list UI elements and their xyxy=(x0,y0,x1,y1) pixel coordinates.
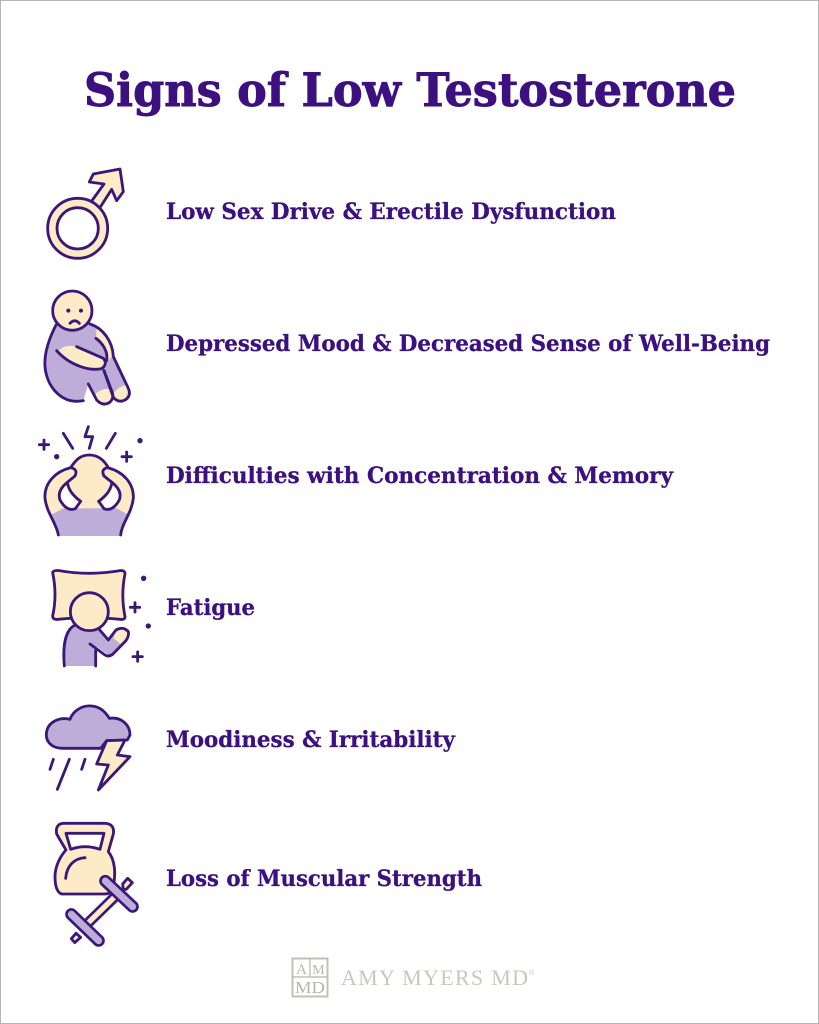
label: fatigue: Fatigue xyxy=(166,595,255,621)
label: moodiness: Moodiness & Irritability xyxy=(166,727,456,753)
label: low sex drive: Low Sex Drive & Erectile Dysfunction xyxy=(166,199,616,225)
label: difficulties with concentration: Difficulties with Concentration & Memory xyxy=(166,463,674,489)
label: loss of muscular strength: Loss of Muscular Strength xyxy=(166,866,482,892)
label: depressed mood: Depressed Mood & Decreased Sense of Well-Being xyxy=(166,331,770,357)
icon: storm cloud xyxy=(46,706,130,790)
logo: Amy Myers MD: A xyxy=(296,962,307,978)
logo: Amy Myers MD: AMY MYERS MD xyxy=(341,965,528,990)
logo: Amy Myers MD: MD xyxy=(295,978,325,997)
icon: head in hands xyxy=(39,427,143,536)
logo: Amy Myers MD: ® xyxy=(529,969,535,977)
icon: male symbol xyxy=(48,169,123,258)
icon: sad seated person xyxy=(45,291,129,405)
title: Signs of Low Testosterone xyxy=(84,63,736,117)
logo: Amy Myers MD xyxy=(292,958,535,997)
logo: Amy Myers MD: M xyxy=(312,963,325,978)
icon: kettlebell and dumbbell xyxy=(55,823,133,943)
icon: person on pillow xyxy=(53,571,151,666)
